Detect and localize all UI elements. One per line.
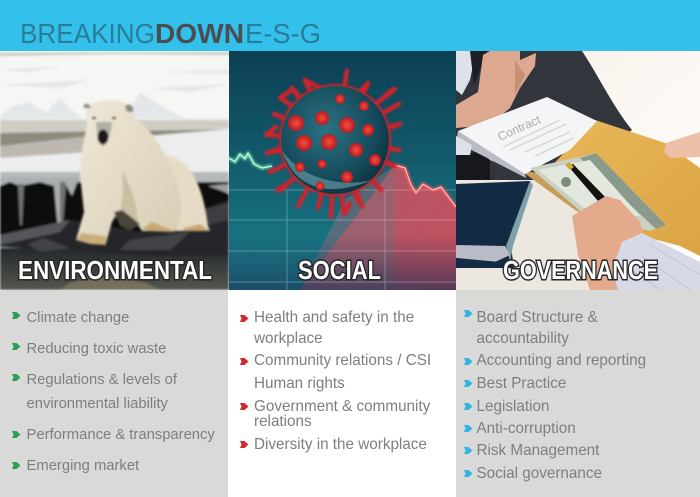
list text: Diversity in the workplace — [254, 436, 427, 453]
title — [20, 18, 321, 49]
hand right — [664, 132, 700, 158]
title: E-S-G — [245, 18, 321, 49]
list text: Accounting and reporting — [476, 352, 646, 369]
label: environmental: ENVIRONMENTAL — [18, 255, 212, 285]
envelope — [545, 120, 700, 256]
list text: Climate change — [26, 310, 129, 326]
list text: Anti-corruption — [476, 420, 576, 437]
list text: Regulations & levels of — [26, 372, 178, 388]
table — [456, 180, 590, 290]
chart grid lines — [229, 190, 456, 290]
sleeve — [612, 233, 700, 290]
list text: workplace — [253, 330, 323, 347]
list text: Government & community — [254, 398, 431, 415]
panel: environmental list — [0, 290, 228, 497]
title: BREAKING — [20, 18, 155, 49]
list text: Social governance — [476, 465, 602, 482]
list text: accountability — [476, 330, 569, 347]
header band — [0, 0, 700, 51]
list text: Performance & transparency — [26, 427, 215, 443]
icon: polar bear — [76, 100, 210, 245]
list text: Health and safety in the — [254, 309, 414, 326]
title: DOWN — [155, 18, 244, 49]
panel: governance list — [456, 290, 700, 497]
list text: Risk Management — [476, 442, 600, 459]
pen — [570, 164, 605, 201]
binder — [456, 181, 530, 268]
bullets: blue — [464, 310, 472, 477]
panel: social photo — [229, 51, 456, 290]
label: social: SOCIAL — [298, 255, 381, 285]
panel: governance photo — [456, 51, 700, 290]
bullets: red — [240, 315, 248, 448]
list text — [26, 310, 215, 474]
cash — [530, 153, 666, 231]
bullets: green — [12, 312, 20, 469]
list text: Human rights — [254, 375, 345, 392]
list text: Community relations / CSI — [254, 352, 431, 369]
panel: environmental photo — [0, 51, 229, 290]
suit — [456, 51, 632, 180]
list text: Board Structure & — [476, 309, 598, 326]
list text: Reducing toxic waste — [26, 341, 166, 357]
list text — [253, 309, 431, 453]
contract — [458, 97, 597, 174]
icon: virus — [266, 71, 400, 217]
list text: environmental liability — [26, 396, 169, 412]
list text: Emerging market — [26, 458, 139, 474]
panel: governance photo: Contract — [496, 112, 543, 144]
list text — [476, 309, 646, 482]
hand raised — [456, 51, 536, 128]
list text: Legislation — [476, 398, 549, 415]
cuff — [456, 136, 472, 155]
panel: social list — [240, 309, 431, 453]
list text: Best Practice — [476, 375, 566, 392]
hand holding — [572, 196, 645, 290]
list text: relations — [254, 413, 312, 430]
label: governance: GOVERNANCE — [503, 255, 658, 285]
chart line — [229, 153, 456, 207]
